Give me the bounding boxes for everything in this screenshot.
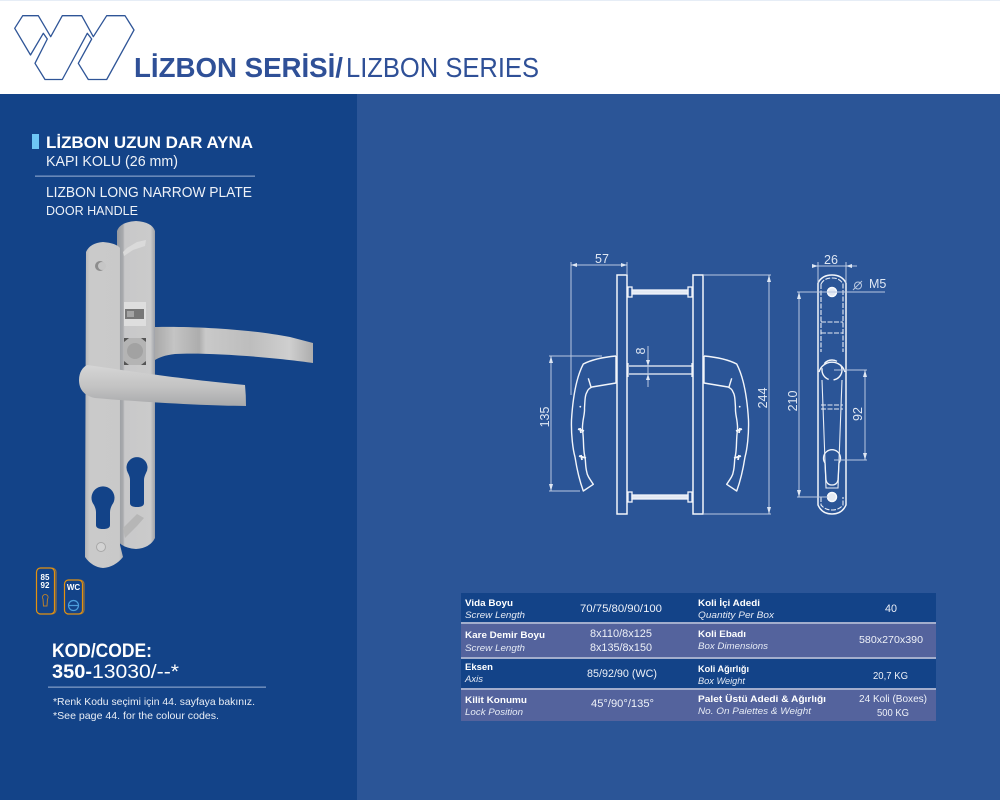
row: lock position / palette quantity: 24 Koli (Boxes) (859, 693, 927, 705)
row: square bar length / box dimensions: 8x135/8x150 (590, 642, 652, 654)
front lever (79, 365, 246, 406)
title: LIZBON SERIES (346, 52, 539, 83)
row: screw length / quantity per box: 70/75/80/90/100 (580, 603, 662, 615)
plates (617, 275, 703, 514)
back lever (155, 327, 313, 363)
front bottom screw (96, 542, 106, 552)
row: axis / box weight: 85/92/90 (WC) (587, 668, 657, 680)
row: lock position / palette quantity: Palet Üstü Adedi & Ağırlığı (698, 694, 826, 705)
row: square bar length / box dimensions: Box Dimensions (698, 641, 768, 652)
dimension 244: 244 (756, 388, 770, 408)
dimension 8 (634, 346, 650, 387)
icon: axis 85/92 (36, 568, 56, 614)
screw holes (828, 288, 836, 502)
inner dashes (821, 278, 843, 510)
front plate (85, 242, 123, 568)
dimension 135 (538, 356, 602, 491)
front top screw (95, 261, 106, 271)
right handle (704, 356, 749, 491)
heading marker (32, 134, 39, 149)
icon: axis 85/92: 92 (41, 581, 50, 590)
specification table (461, 593, 936, 721)
icon: WC: WC (67, 583, 80, 592)
row: screw length / quantity per box: Koli İçi Adedi (698, 598, 760, 609)
label: M5 (797, 277, 886, 292)
product heading (32, 133, 255, 218)
colour code notes: *See page 44. for the colour codes. (53, 710, 219, 722)
dimension 26: 26 (824, 253, 838, 267)
screws and spindle (628, 287, 692, 502)
row: screw length / quantity per box: Screw Length (465, 610, 525, 621)
row: screw length / quantity per box: Quantity Per Box (698, 610, 775, 621)
product code: 13030/--* (92, 662, 180, 683)
row: axis / box weight (461, 659, 936, 688)
colour code notes (53, 696, 255, 722)
back plate (117, 221, 155, 549)
dimension 135: 135 (538, 407, 552, 427)
product photo: door handle (79, 221, 313, 568)
row: square bar length / box dimensions: Screw Length (465, 643, 525, 654)
product heading: LIZBON LONG NARROW PLATE (46, 184, 252, 201)
row: lock position / palette quantity: Kilit Konumu (465, 695, 527, 706)
row: square bar length / box dimensions: 580x270x390 (859, 634, 923, 646)
dimension 57 (571, 252, 627, 395)
technical drawing: front view (538, 252, 771, 514)
dimension 210: 210 (786, 391, 800, 411)
row: lock position / palette quantity: No. On Palettes & Weight (698, 706, 811, 717)
back keyhole (126, 457, 148, 507)
title (134, 52, 539, 83)
product code (48, 641, 266, 688)
row: square bar length / box dimensions (461, 624, 936, 657)
row: screw length / quantity per box: 40 (885, 603, 897, 615)
logo (15, 16, 134, 79)
technical drawing: side view (786, 253, 886, 514)
row: square bar length / box dimensions: Koli Ebadı (698, 629, 746, 640)
product code: 350- (52, 662, 92, 683)
row: axis / box weight: Axis (464, 674, 483, 685)
header band (0, 0, 1000, 94)
product heading: LİZBON UZUN DAR AYNA (46, 133, 253, 152)
panel: left product panel (0, 94, 357, 800)
dimension 57: 57 (595, 252, 609, 266)
row: square bar length / box dimensions: 8x110/8x125 (590, 628, 652, 640)
back plate details (123, 240, 146, 256)
plate outline (818, 275, 846, 514)
lower keyhole (824, 450, 841, 485)
row: screw length / quantity per box (461, 593, 936, 622)
label: M5: M5 (869, 277, 886, 291)
product heading: DOOR HANDLE (46, 203, 138, 218)
dimension 92: 92 (851, 407, 865, 421)
dimension 92 (834, 370, 867, 460)
dimension 244 (703, 275, 771, 514)
icon: axis 85/92: 85 (41, 573, 50, 582)
row: axis / box weight: Box Weight (698, 676, 745, 687)
narrow taper (822, 380, 842, 488)
row: lock position / palette quantity (461, 690, 936, 721)
dimension 26 (812, 253, 857, 283)
title: LİZBON SERİSİ/ (134, 52, 343, 83)
front keyhole (92, 486, 115, 529)
product code: KOD/CODE: (52, 641, 152, 662)
row: lock position / palette quantity: 45°/90°/135° (591, 698, 654, 710)
table separators (461, 593, 936, 721)
colour code notes: *Renk Kodu seçimi için 44. sayfaya bakınız. (53, 696, 255, 708)
left handle (571, 356, 616, 491)
row: square bar length / box dimensions: Kare Demir Boyu (465, 630, 545, 641)
dimension 210 (786, 292, 828, 497)
row: axis / box weight: Eksen (465, 662, 493, 673)
product heading: KAPI KOLU (26 mm) (46, 153, 178, 170)
upper cut-out (819, 360, 845, 380)
row: lock position / palette quantity: Lock Position (465, 707, 523, 718)
dimension 8: 8 (634, 347, 648, 354)
row: lock position / palette quantity: 500 KG (877, 707, 909, 719)
row: axis / box weight: Koli Ağırlığı (698, 664, 749, 675)
icon: WC (64, 580, 84, 614)
row: axis / box weight: 20,7 KG (873, 670, 908, 682)
row: screw length / quantity per box: Vida Boyu (465, 598, 513, 609)
